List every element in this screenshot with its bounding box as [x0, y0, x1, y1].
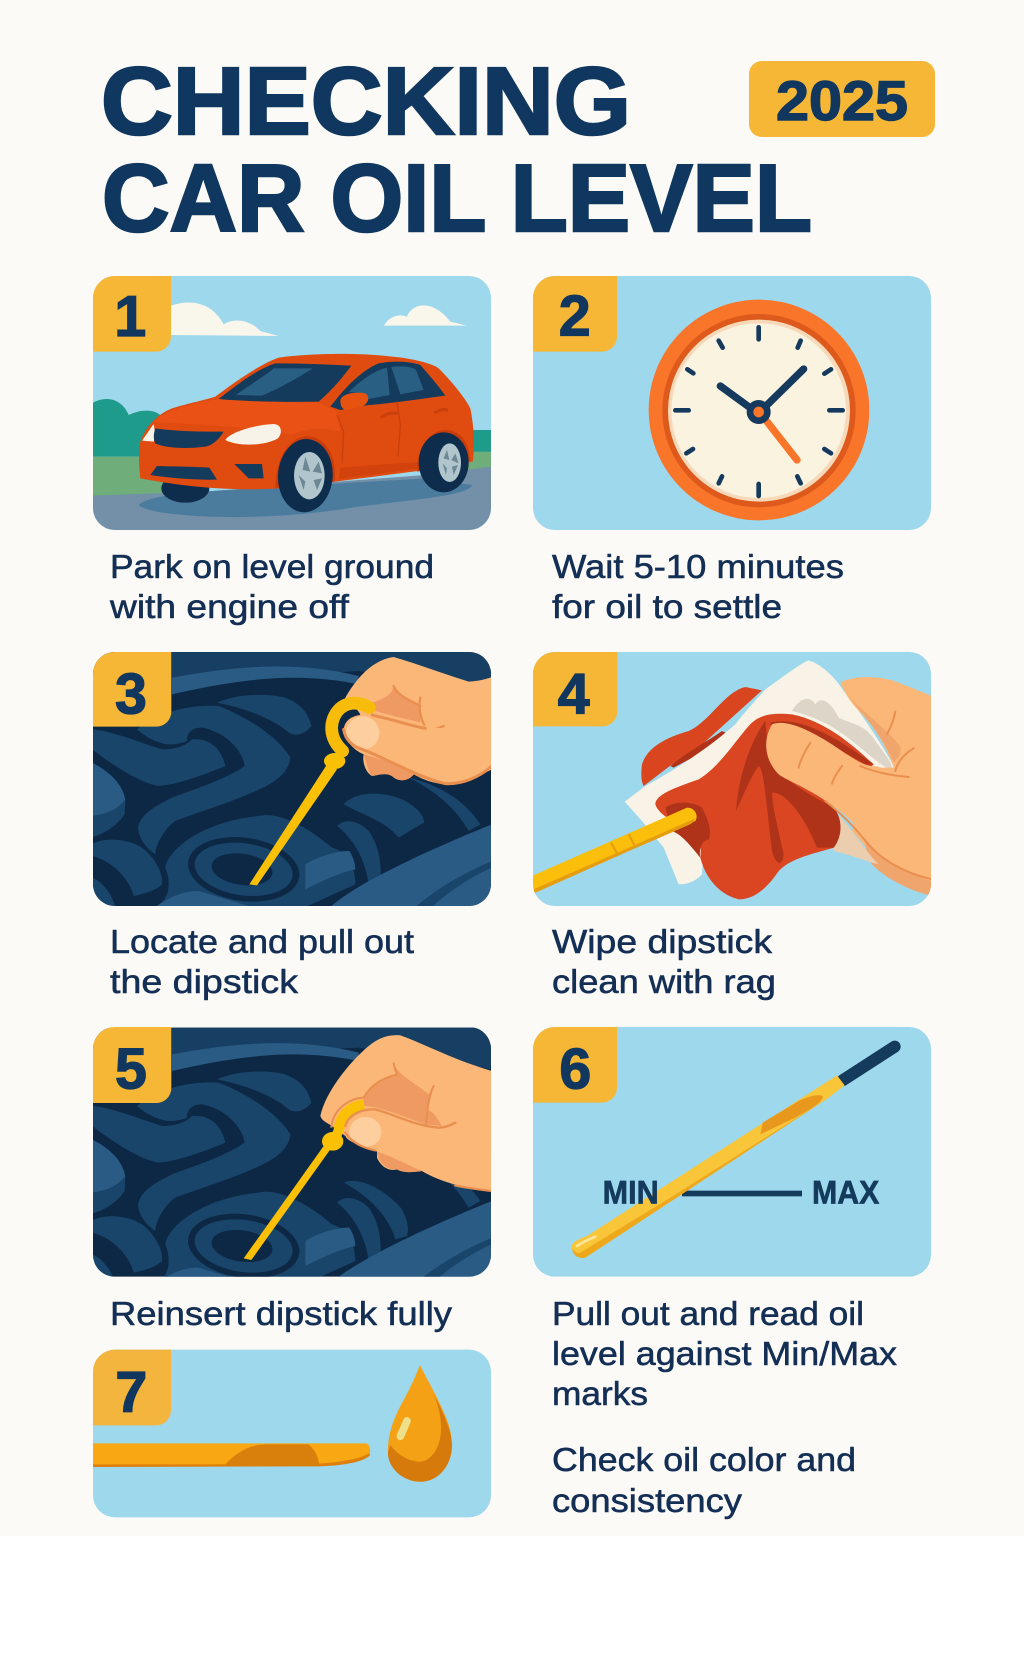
number badge 5: [92, 1026, 171, 1103]
clouds: [169, 303, 467, 336]
caption: step 4: [552, 923, 776, 1000]
number badge 3: 3: [115, 662, 147, 726]
landscape: [92, 399, 492, 531]
caption: step 5: Reinsert dipstick fully: [110, 1295, 453, 1332]
panel: step 3 pull out dipstick: [92, 651, 492, 908]
max label and level line: MAX: [812, 1174, 880, 1211]
number badge 6: 6: [559, 1037, 591, 1101]
caption: step 7: Check oil color and: [552, 1441, 856, 1478]
panel: step 6 read min max: [532, 1026, 932, 1282]
clock hands: [720, 369, 804, 460]
caption: step 4: Wipe dipstick: [552, 923, 773, 960]
dipstick with oil: [92, 1443, 370, 1467]
number badge 2: [532, 275, 617, 352]
hand: [320, 1035, 492, 1191]
number badge 3: [92, 651, 171, 727]
title: [101, 48, 812, 252]
year badge: 2025: [776, 69, 908, 132]
dipstick: [249, 703, 369, 885]
caption: step 6: Pull out and read oil: [552, 1295, 864, 1332]
engine bay: [92, 1028, 492, 1285]
panel: step 2 clock: [532, 275, 932, 531]
panel: step 5 reinsert dipstick: [92, 1026, 492, 1285]
thumb: [345, 1109, 492, 1191]
caption: step 3: [110, 923, 414, 1000]
caption: step 6: marks: [552, 1375, 648, 1412]
dipstick: [244, 1098, 365, 1260]
max label and level line: [682, 1180, 880, 1204]
rag back: [641, 687, 762, 786]
number badge 4: [532, 651, 617, 726]
panel: step 7 oil colour: [92, 1345, 492, 1525]
panel: step 1 park the car: [92, 275, 492, 531]
engine bay: [92, 651, 492, 908]
caption: step 4: clean with rag: [552, 963, 776, 1000]
min label: MIN: [603, 1174, 659, 1211]
number badge 4: 4: [558, 662, 590, 726]
caption: step 1: with engine off: [109, 588, 350, 625]
caption: step 3: the dipstick: [110, 963, 299, 1000]
car: [139, 354, 474, 514]
number badge 1: [92, 275, 171, 352]
title: CHECKING: [101, 48, 631, 155]
caption: step 6: level against Min/Max: [552, 1335, 898, 1372]
hand palm: [840, 677, 932, 896]
dipstick: [532, 808, 697, 893]
year badge: [749, 61, 935, 137]
caption: step 1: [109, 548, 434, 625]
oil drop: [388, 1365, 452, 1482]
number badge 7: 7: [115, 1361, 147, 1425]
caption: step 6: [552, 1295, 898, 1412]
thumb: [344, 714, 492, 784]
clock face: [649, 300, 869, 520]
number badge 1: 1: [114, 285, 146, 349]
paper towel: [625, 660, 894, 884]
red rag: [655, 714, 874, 899]
number badge 7: [92, 1345, 171, 1425]
dipstick: [571, 1047, 895, 1258]
peach shadow: [834, 814, 879, 864]
number badge 6: [532, 1026, 617, 1103]
title: CAR OIL LEVEL: [102, 145, 812, 252]
caption: step 3: Locate and pull out: [110, 923, 414, 960]
number badge 5: 5: [115, 1037, 147, 1101]
caption: step 2: [552, 548, 844, 625]
thumb: [766, 712, 932, 881]
caption: step 1: Park on level ground: [110, 548, 434, 585]
caption: step 2: Wait 5-10 minutes: [552, 548, 844, 585]
caption: step 7: [552, 1441, 856, 1519]
caption: step 7: consistency: [552, 1482, 743, 1519]
panel: step 4 wipe with rag: [532, 651, 932, 907]
caption: step 2: for oil to settle: [552, 588, 782, 625]
number badge 2: 2: [559, 284, 591, 348]
hand: [343, 657, 492, 784]
